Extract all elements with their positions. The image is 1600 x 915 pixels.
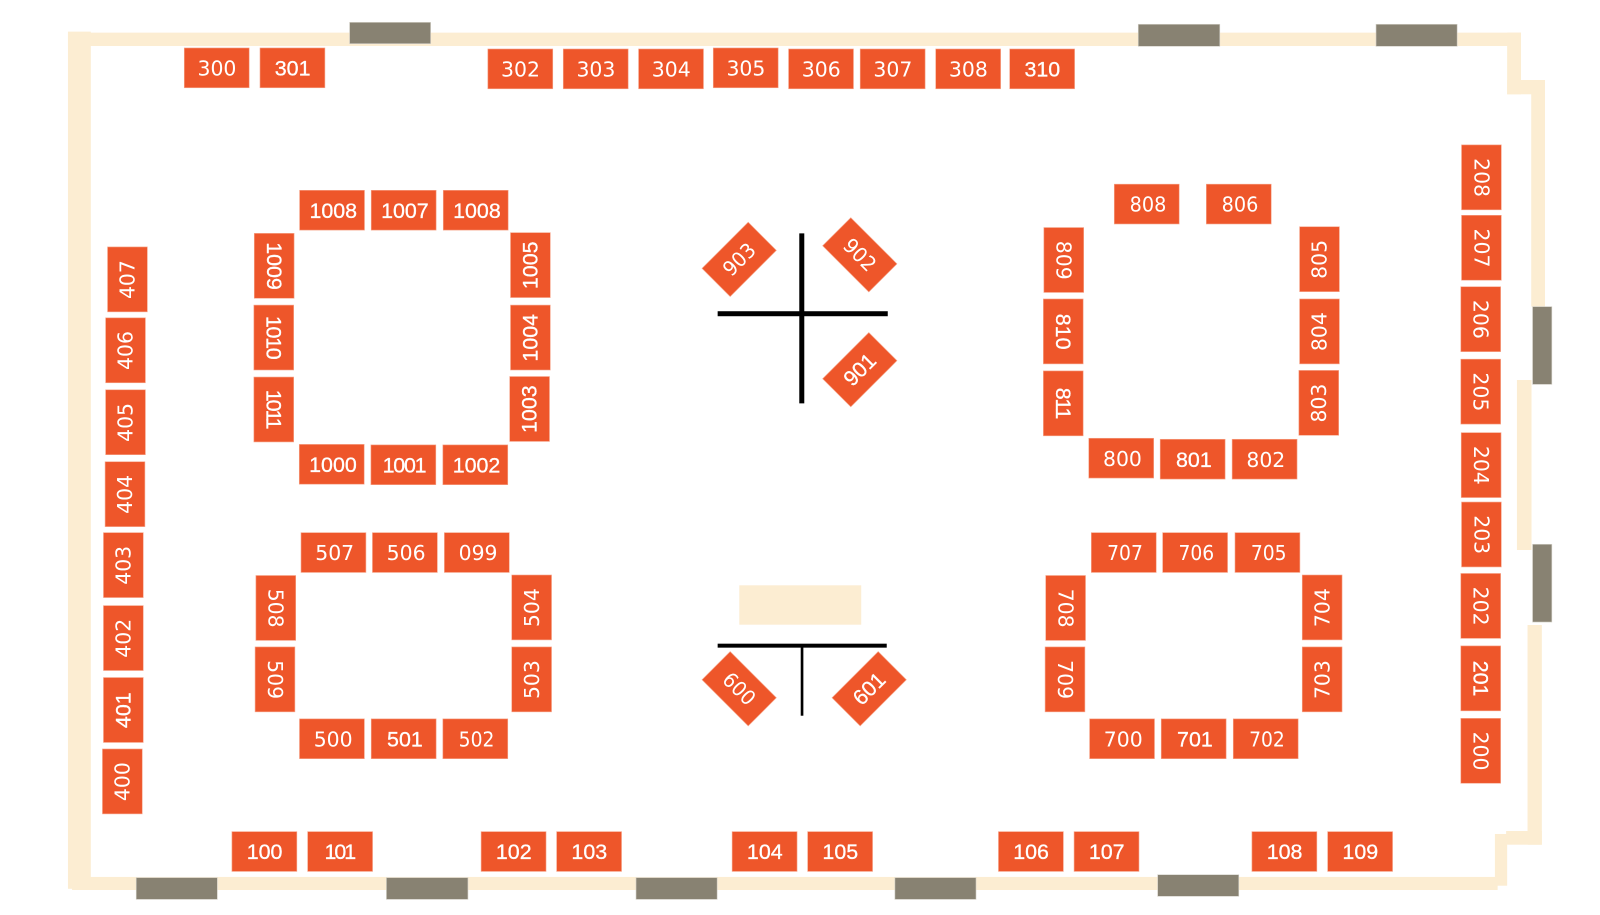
booth 307 — [860, 49, 925, 89]
left column booths — [102, 247, 147, 814]
booth 103 — [557, 832, 622, 871]
booth 208: 208 — [1469, 158, 1493, 197]
booth 502: 502 — [459, 727, 494, 751]
booth 705 — [1235, 533, 1300, 572]
booth 304: 304 — [652, 58, 691, 82]
booth 704 — [1302, 575, 1342, 640]
booth 307: 307 — [873, 58, 912, 82]
booth 100 — [232, 832, 297, 871]
booth 108 — [1252, 832, 1317, 871]
booth 300: 300 — [197, 57, 236, 81]
booth 107 — [1074, 832, 1139, 871]
booth 101 — [308, 832, 373, 871]
booth 801 — [1160, 439, 1225, 479]
booth 902 — [823, 218, 897, 292]
booth 106 — [998, 832, 1063, 871]
booth 400 — [102, 749, 142, 814]
booth 204 — [1461, 433, 1501, 498]
booth 300 — [184, 48, 249, 88]
booth 801: 801 — [1176, 448, 1212, 472]
booth 207: 207 — [1469, 228, 1493, 267]
booth 808 — [1114, 184, 1179, 224]
booth 403: 403 — [112, 546, 136, 585]
booth 1007 — [371, 190, 436, 230]
booth 109: 109 — [1342, 840, 1378, 864]
booth 703 — [1302, 647, 1342, 712]
booth 707 — [1091, 533, 1156, 572]
booth 709: 709 — [1053, 660, 1077, 699]
booth 811: 811 — [1051, 388, 1075, 419]
booth 703: 703 — [1310, 660, 1334, 699]
booth 1000 — [299, 444, 364, 484]
top row booths — [184, 48, 1075, 89]
booth 506: 506 — [387, 541, 426, 565]
booth 305: 305 — [726, 57, 765, 81]
booth cluster 800 — [1043, 184, 1339, 479]
booth 1008 right: 1008 — [453, 199, 501, 223]
booth 503: 503 — [520, 660, 544, 699]
booth 102 — [481, 832, 546, 871]
booth 405: 405 — [114, 403, 138, 442]
booth 105 — [808, 832, 873, 871]
booth 700: 700 — [1104, 727, 1143, 751]
booth 809 — [1044, 228, 1084, 292]
booth 303: 303 — [576, 58, 615, 82]
booth 306 — [789, 49, 853, 89]
booth 1009: 1009 — [262, 242, 286, 290]
booth 100: 100 — [247, 840, 283, 864]
right column booths — [1461, 145, 1501, 783]
booth 101: 101 — [324, 840, 356, 864]
booth 204: 204 — [1469, 446, 1493, 485]
booth cluster 500 — [255, 533, 552, 759]
booth 303 — [563, 49, 628, 89]
booth 803 — [1299, 370, 1339, 435]
bottom row booths — [232, 832, 1393, 871]
doors along the top wall — [350, 22, 1457, 46]
booth 301: 301 — [275, 57, 311, 81]
booth cluster 700 — [1045, 533, 1342, 759]
booth 809: 809 — [1052, 241, 1076, 280]
booth 601: 601 — [848, 668, 890, 710]
booth 306: 306 — [802, 58, 841, 82]
booth 501 — [371, 719, 436, 759]
booth 407: 407 — [116, 260, 140, 299]
booth 1004 — [511, 305, 550, 370]
booth 401 — [103, 678, 143, 742]
booth 406: 406 — [114, 331, 138, 370]
booth 702: 702 — [1249, 727, 1285, 751]
booth 600 — [702, 652, 776, 726]
booth 701 — [1161, 719, 1226, 759]
booth 708 — [1046, 576, 1086, 640]
booth 402 — [103, 606, 143, 671]
booth 802 — [1232, 439, 1297, 479]
booth 1011 — [254, 377, 294, 442]
booth 304 — [639, 49, 703, 89]
booth 504 — [512, 575, 552, 640]
booth 109 — [1328, 832, 1393, 871]
booth 1008 right — [443, 190, 508, 230]
booth 808: 808 — [1130, 193, 1166, 217]
booth 104 — [732, 832, 797, 871]
booth 500 — [299, 719, 364, 759]
booth 201 — [1461, 646, 1501, 711]
booth 206 — [1461, 287, 1501, 352]
booth 707: 707 — [1107, 541, 1143, 565]
booth 207 — [1462, 215, 1501, 280]
central cross partition — [718, 233, 888, 403]
booth 202 — [1461, 573, 1501, 638]
booth 404 — [105, 462, 145, 527]
booth 701: 701 — [1177, 727, 1213, 751]
booth 1008 left: 1008 — [309, 199, 357, 223]
booth 1005 — [511, 233, 550, 298]
booth 201: 201 — [1469, 661, 1493, 696]
booth 202: 202 — [1469, 587, 1493, 626]
booth 105: 105 — [822, 840, 858, 864]
booth 099 — [444, 533, 509, 572]
booth 700 — [1090, 719, 1154, 759]
booth 806 — [1206, 184, 1271, 224]
booth 302 — [488, 49, 553, 89]
booth 500: 500 — [314, 727, 353, 751]
booth 1011: 1011 — [262, 390, 286, 430]
booth 705: 705 — [1251, 541, 1287, 565]
booth 1003 — [510, 377, 549, 441]
stage block — [739, 585, 861, 625]
booth 810 — [1043, 299, 1083, 364]
booth 305 — [713, 48, 778, 88]
booth 1003: 1003 — [518, 385, 542, 433]
booth 702 — [1233, 719, 1298, 759]
booth 902: 902 — [838, 233, 881, 276]
booth 709 — [1045, 647, 1085, 712]
booth 1002 — [443, 445, 508, 485]
doors along the right wall — [1533, 307, 1552, 622]
booth 708: 708 — [1053, 589, 1077, 628]
booth 805 — [1300, 227, 1339, 292]
booth 811 — [1043, 371, 1083, 436]
booth 403 — [103, 533, 143, 598]
booth 102: 102 — [496, 840, 532, 864]
booth 810: 810 — [1051, 314, 1075, 350]
booth 803: 803 — [1307, 384, 1331, 423]
booth 1010 — [254, 305, 294, 370]
booth 1002: 1002 — [453, 453, 500, 477]
booth 302: 302 — [501, 58, 540, 82]
booth 806: 806 — [1222, 193, 1258, 217]
booth 706 — [1163, 533, 1228, 572]
booth 503 — [512, 647, 552, 712]
booth 901: 901 — [839, 349, 881, 391]
booth 099: 099 — [459, 541, 498, 565]
booth 800 — [1089, 438, 1154, 478]
booth 107: 107 — [1089, 840, 1125, 864]
booth 301 — [260, 48, 325, 88]
booth 800: 800 — [1103, 447, 1142, 471]
booth 205 — [1461, 359, 1501, 424]
booth 406 — [106, 318, 145, 383]
booth 805: 805 — [1308, 240, 1332, 279]
central T partition — [718, 644, 887, 716]
booth 804: 804 — [1308, 312, 1332, 351]
booth 108: 108 — [1267, 840, 1302, 864]
booth 706: 706 — [1178, 541, 1214, 565]
booth 310: 310 — [1024, 58, 1060, 82]
booth 1008 left — [300, 190, 364, 230]
booth cluster 1000 — [254, 190, 550, 485]
booth 509: 509 — [263, 660, 287, 699]
booth 1005: 1005 — [519, 241, 543, 289]
booth 203: 203 — [1469, 515, 1493, 554]
booth 1000: 1000 — [309, 453, 357, 477]
booth 104: 104 — [747, 840, 783, 864]
booth 1010: 1010 — [262, 316, 286, 360]
booth 405 — [106, 390, 145, 455]
booth 601 — [832, 652, 906, 726]
booth 509 — [255, 647, 295, 712]
doors along the bottom wall — [136, 875, 1239, 899]
booth 103: 103 — [571, 840, 607, 864]
booth 310 — [1010, 49, 1075, 89]
booth 203 — [1462, 502, 1501, 567]
booth 600: 600 — [718, 667, 761, 710]
booth 200: 200 — [1469, 732, 1493, 770]
booth 508 — [256, 576, 296, 640]
booth 501: 501 — [387, 727, 423, 751]
booth 407 — [108, 247, 147, 312]
booth 903 — [702, 222, 776, 297]
booth 401: 401 — [112, 692, 136, 728]
booth 404: 404 — [113, 475, 137, 514]
booth 206: 206 — [1469, 300, 1493, 339]
booth 502 — [443, 719, 508, 759]
booth 308 — [936, 49, 1001, 89]
booth 506 — [372, 533, 437, 572]
booth 507 — [301, 533, 366, 572]
booth 400: 400 — [110, 762, 134, 801]
booth 1009 — [254, 233, 294, 298]
booth 802: 802 — [1246, 448, 1285, 472]
booth 308: 308 — [949, 58, 988, 82]
booth 200 — [1461, 718, 1501, 783]
booth 1001: 1001 — [383, 453, 427, 477]
booth 205: 205 — [1469, 372, 1493, 411]
booth 704: 704 — [1310, 588, 1334, 627]
booth 507: 507 — [315, 541, 354, 565]
booth 804 — [1300, 299, 1339, 364]
booth 402: 402 — [112, 619, 136, 658]
booth 901 — [823, 333, 897, 407]
booth 1004: 1004 — [519, 314, 543, 362]
booth 106: 106 — [1013, 840, 1049, 864]
booth 508: 508 — [264, 589, 288, 628]
booth 208 — [1462, 145, 1501, 210]
booth 1007: 1007 — [381, 199, 429, 223]
booth 1001 — [371, 445, 436, 485]
booth 504: 504 — [520, 588, 544, 627]
booth 903: 903 — [718, 238, 761, 281]
